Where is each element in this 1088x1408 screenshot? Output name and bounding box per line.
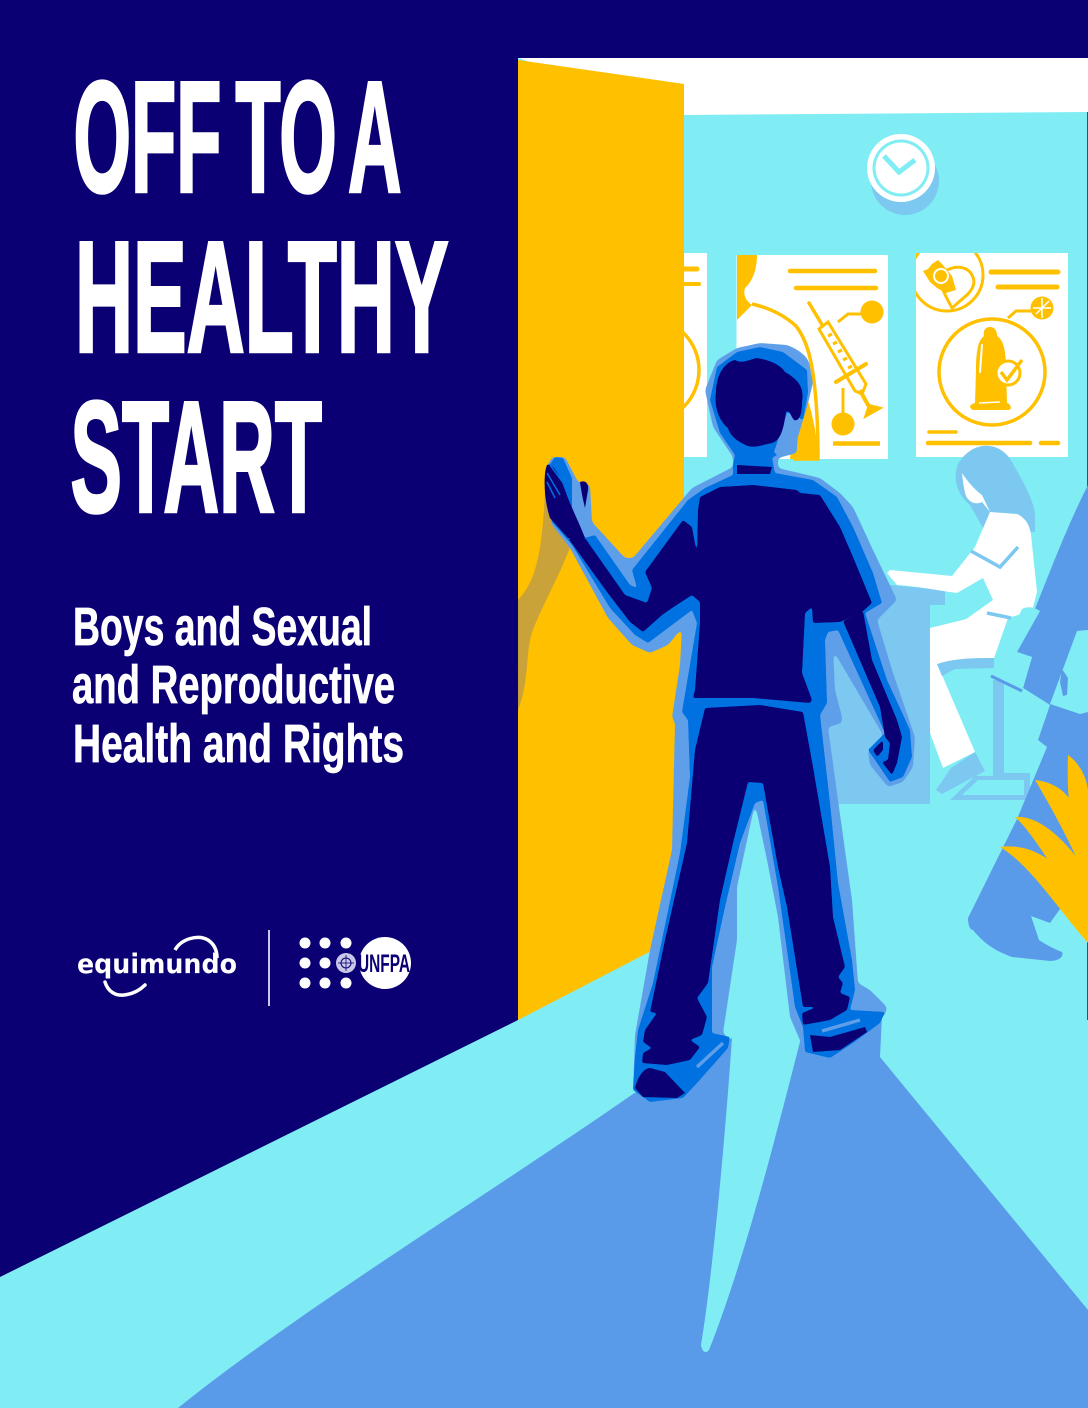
walking person [968,485,1088,961]
right page edge [1087,112,1088,1020]
body outline on poster [737,255,757,320]
poster text lines [790,271,880,444]
hand holding packet [916,253,984,312]
snowflake badge [1008,311,1032,318]
boy neck highlight [774,413,800,458]
subtitle: Health and Rights [73,714,404,774]
poster 3: condom [911,239,1068,457]
doctor hair [956,446,1035,532]
room wall [518,58,1088,1028]
boy collar [737,465,772,474]
walking person's hand [1060,669,1068,696]
plant leaves [1000,755,1088,943]
stool seat [937,658,994,676]
shoulder and arm line [752,304,818,459]
boy right arm and fist [843,611,902,775]
UN globe emblem [336,953,356,973]
UNFPA dots [300,938,352,988]
UNFPA wordmark: UNFPA [358,950,410,978]
doctor sleeve and waist marks [971,547,1018,618]
boy shirt [568,485,872,703]
equimundo logo: equimundo [77,949,237,980]
floor shadow [178,1015,1088,1408]
equimundo logo [77,937,237,995]
boy inner outline [545,347,912,1102]
boy seen from behind [545,343,915,1102]
hand shadow on door [518,490,570,710]
floor [0,947,1088,1408]
boy right shoe [810,1027,867,1052]
doctor seated at desk [887,446,1037,800]
subtitle: Boys and Sexual [73,597,372,657]
UNFPA logo [300,937,411,989]
doctor shoe [936,752,985,794]
title [70,50,448,546]
poster body fill beside boy [790,395,818,459]
UNFPA circle [359,937,411,989]
poster 1 [684,253,707,457]
condom badge [939,319,1045,425]
boy left shoe [635,1068,685,1098]
gap between arm and bag [1050,630,1088,714]
syringe [809,303,881,417]
title: OFF TO A [74,50,402,226]
logo divider [268,930,270,1006]
subtitle: and Reproductive [72,655,395,715]
boy trousers [642,705,850,1065]
title: HEALTHY [75,210,448,386]
subtitle [72,597,404,774]
boy outer glow [545,343,915,1102]
boy thumb [580,481,588,508]
open door [518,60,684,1020]
doctor top and arm [887,473,1037,622]
stool [950,680,1030,800]
title: START [70,370,322,546]
raised hand [545,465,585,538]
chair back [990,607,1050,705]
doctor trousers [930,614,1008,768]
boy hair [716,358,803,447]
shoe highlights [697,1020,860,1067]
ceiling [518,58,1088,115]
poster 2: vaccine [736,255,888,459]
poster text lines [928,272,1058,443]
desk [800,580,945,804]
wall clock [867,134,939,215]
